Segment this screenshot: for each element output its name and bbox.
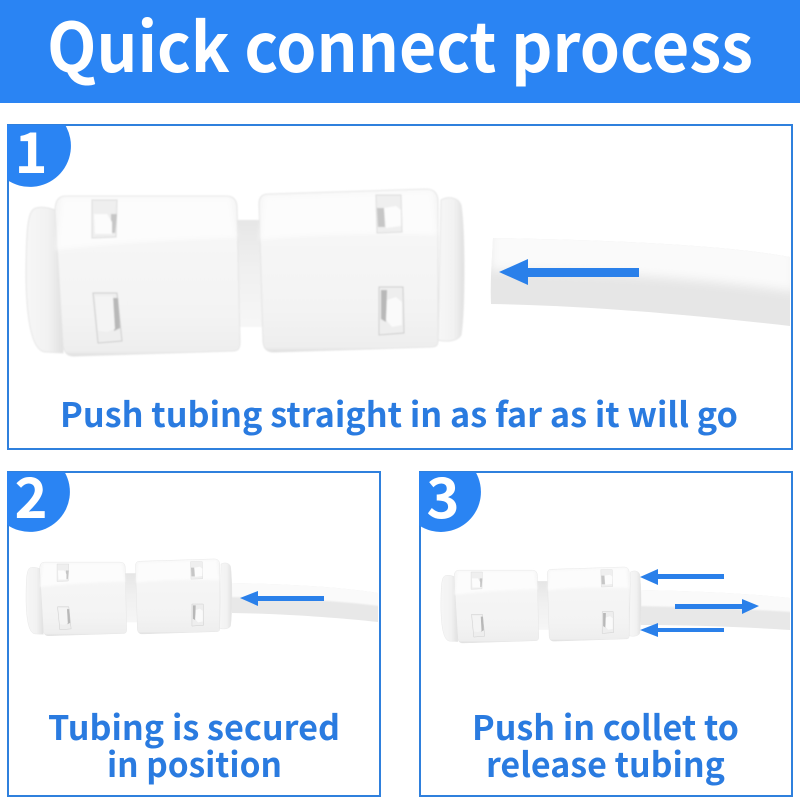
step 2 badge: 2 <box>14 454 48 535</box>
caption: Push tubing straight in as far as it will go <box>60 388 738 437</box>
caption: in position <box>107 738 282 787</box>
connector <box>26 559 232 636</box>
step 1 badge <box>7 109 71 190</box>
panel: step 3 <box>419 454 792 796</box>
arrow: tubing pull out <box>675 599 759 614</box>
connector <box>26 189 464 356</box>
caption <box>48 701 340 787</box>
step 1 badge: 1 <box>14 109 48 190</box>
connector <box>441 567 641 643</box>
title banner <box>0 0 800 103</box>
panel: step 2 <box>7 454 380 796</box>
caption <box>472 701 739 787</box>
tubing <box>232 583 378 622</box>
panel: step 1 <box>7 109 795 449</box>
tubing <box>490 238 790 326</box>
tubing <box>641 590 790 630</box>
arrow: lower collet push <box>640 623 724 637</box>
caption: release tubing <box>486 738 725 787</box>
caption: Tubing is secured <box>48 701 340 750</box>
step 3 badge <box>419 454 481 535</box>
arrow: tubing direction <box>240 591 324 606</box>
step 3 badge: 3 <box>426 454 460 535</box>
arrow: push in <box>499 259 639 285</box>
caption: Push in collet to <box>472 701 739 750</box>
arrow: upper collet push <box>640 569 724 585</box>
step 2 badge <box>7 454 70 535</box>
